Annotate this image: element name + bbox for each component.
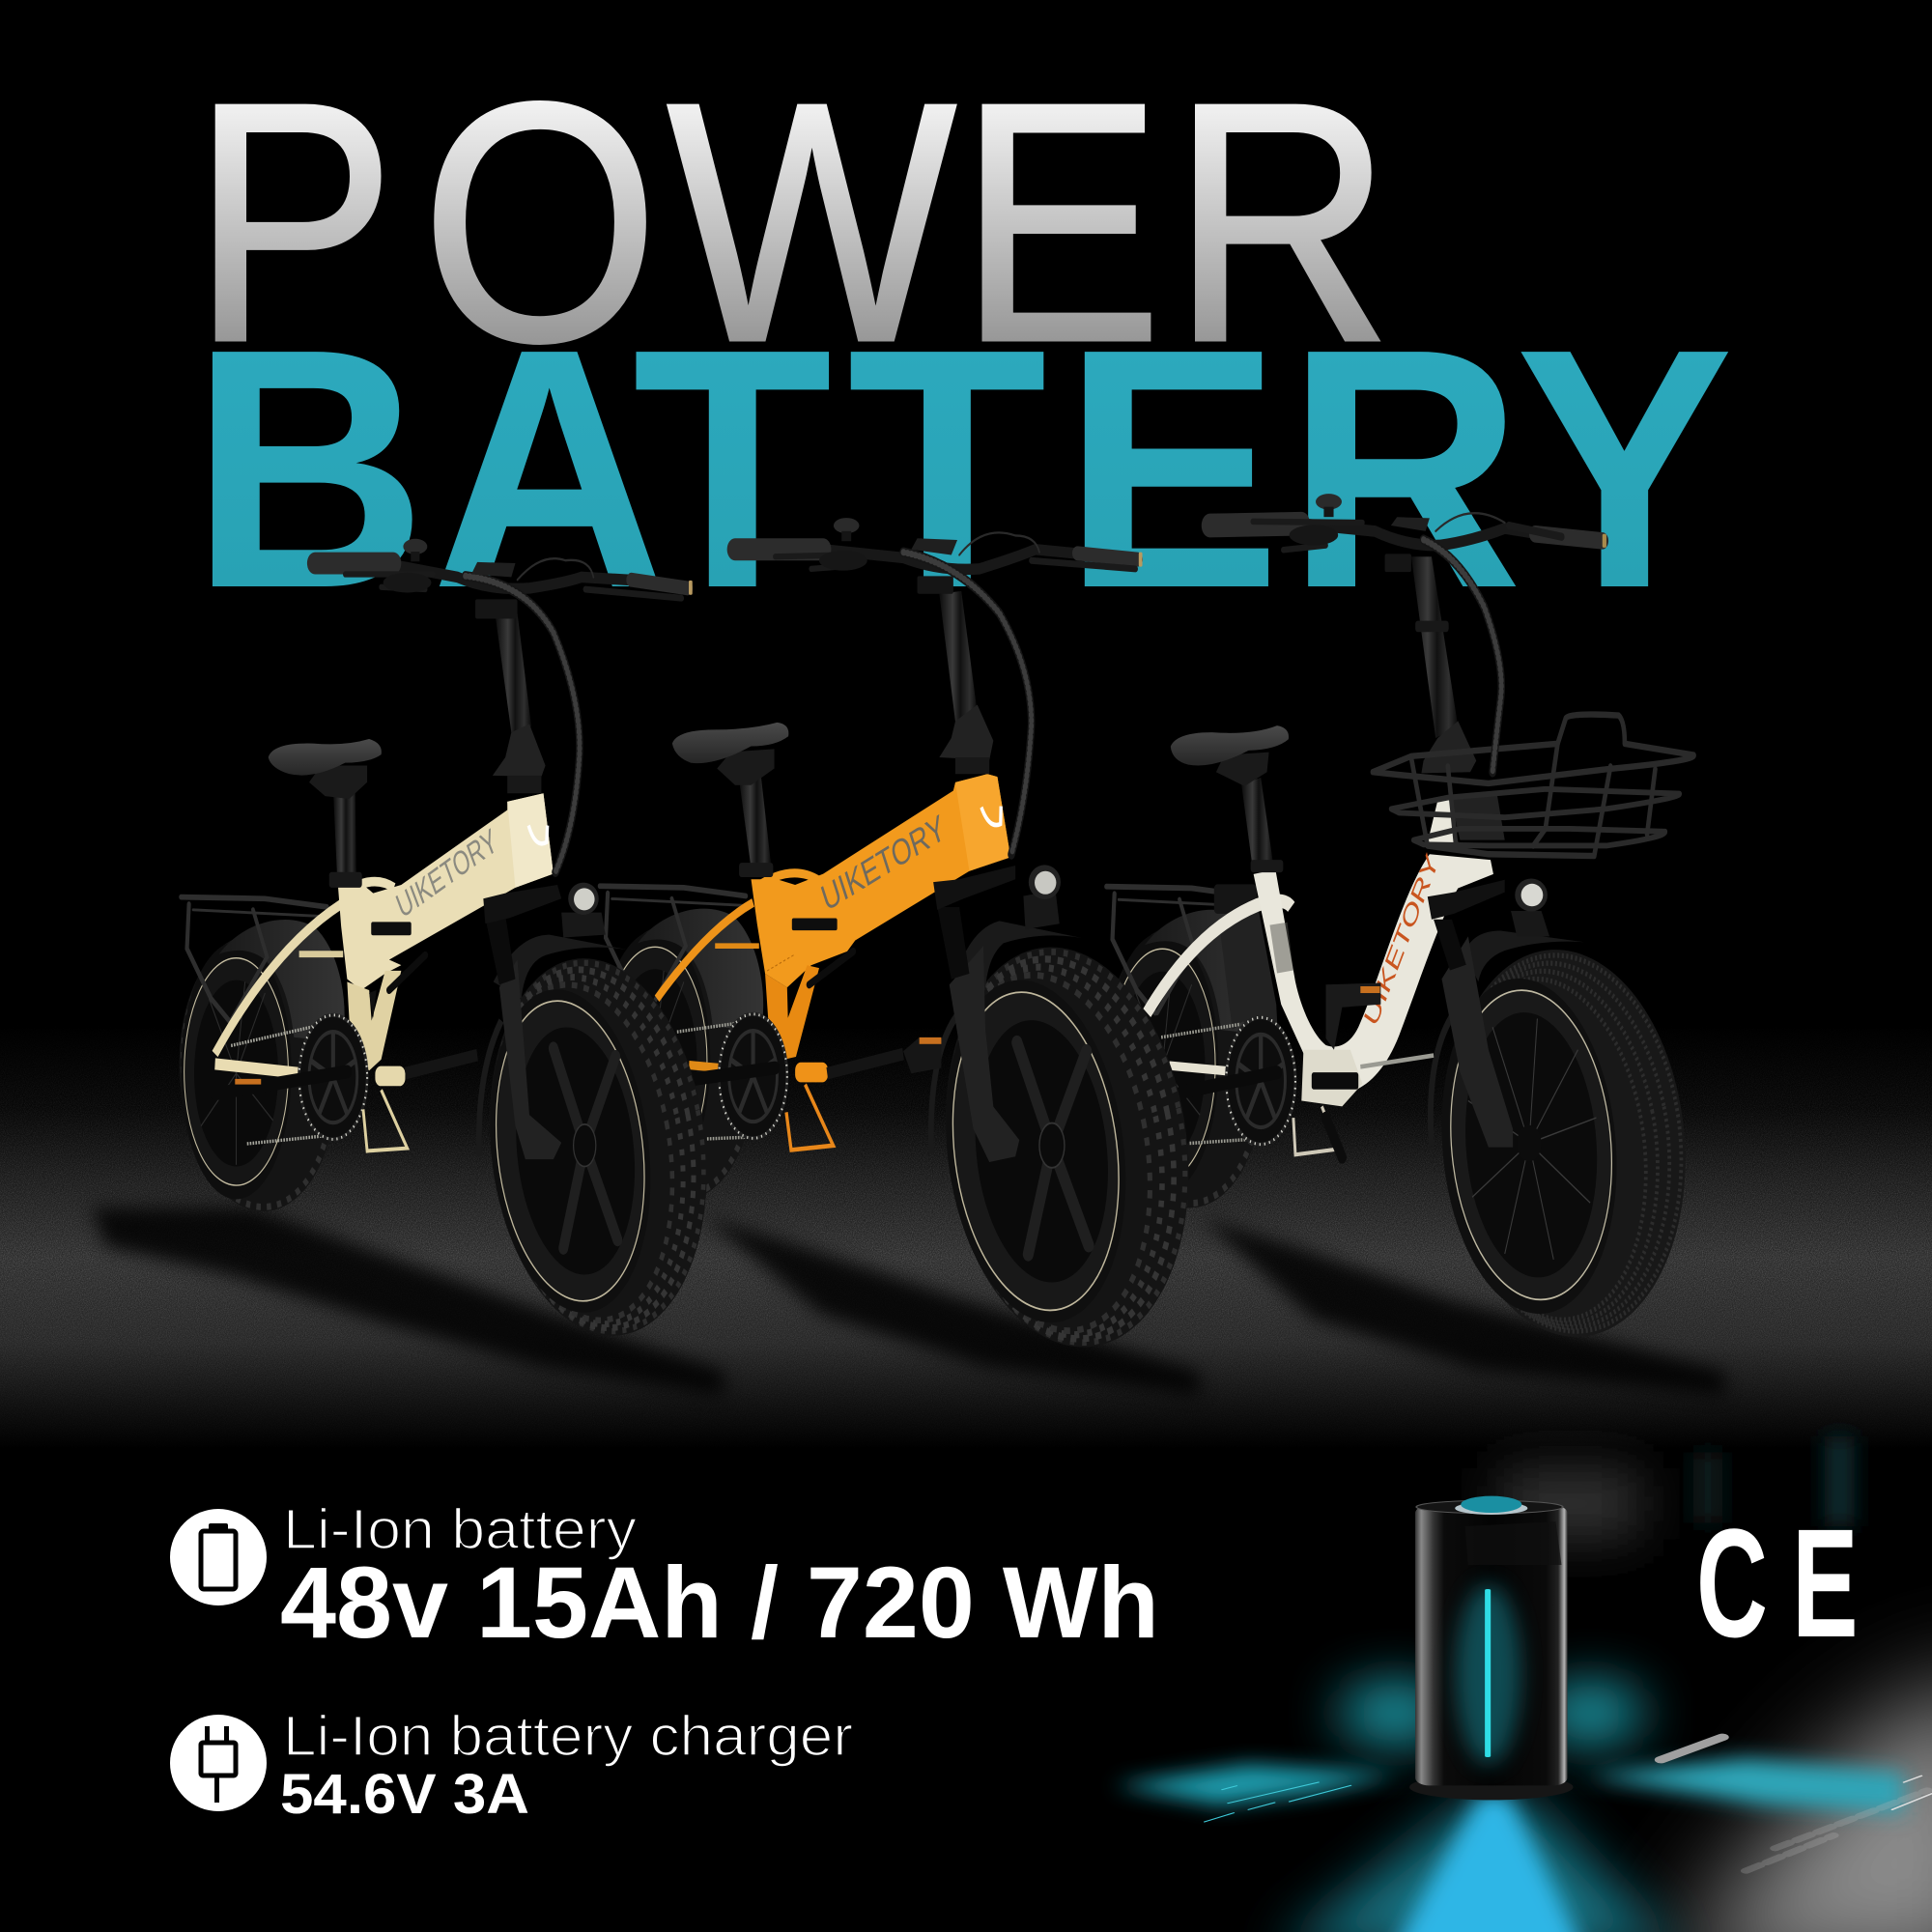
handlebar xyxy=(315,558,688,872)
seat xyxy=(1171,725,1289,872)
handlebar xyxy=(735,532,1138,854)
stem xyxy=(1385,554,1505,843)
front mudguard stay xyxy=(479,1021,501,1156)
bike 1: cream folding bike xyxy=(166,539,736,1370)
bike 2: orange folding bike xyxy=(585,518,1222,1383)
fork and fender xyxy=(483,883,628,1159)
spec icon: plug xyxy=(170,1715,267,1811)
seat xyxy=(269,739,382,888)
rear wheel xyxy=(585,886,768,1214)
bike 3: white step-through with basket xyxy=(1092,494,1716,1375)
frame logo: UIKETORY xyxy=(817,808,950,920)
battery top xyxy=(1416,1496,1563,1515)
battery shoulder xyxy=(1465,1521,1561,1565)
spec value: charger output: 54.6V 3A xyxy=(280,1763,529,1826)
spec label: charger type: Li-Ion battery charger xyxy=(283,1705,853,1768)
battery body xyxy=(1415,1505,1568,1785)
fork and fender xyxy=(1428,879,1584,1148)
teal glow lobes xyxy=(1114,1683,1904,1932)
front wheel xyxy=(460,924,736,1370)
drivetrain xyxy=(1161,982,1434,1157)
title: BATTERY: BATTERY xyxy=(190,279,1734,659)
frame xyxy=(1147,854,1493,1106)
front mudguard stay xyxy=(1431,1010,1456,1146)
ground xyxy=(0,1024,1932,1449)
front wheel xyxy=(1415,912,1716,1375)
basket xyxy=(1373,715,1694,856)
title: POWER: POWER xyxy=(191,32,1393,413)
battery base xyxy=(1409,1775,1574,1800)
rear wheel xyxy=(1092,887,1277,1222)
front mudguard stay xyxy=(931,1012,959,1153)
stem xyxy=(918,576,993,774)
drivetrain xyxy=(215,922,477,1151)
spec value: battery capacity: 48v 15Ah / 720 Wh xyxy=(280,1547,1159,1660)
gray light haze xyxy=(1670,1674,1932,1932)
logo mark xyxy=(528,826,548,843)
blurred background light xyxy=(1500,1436,1854,1539)
front wheel xyxy=(913,911,1222,1383)
CE mark: CE xyxy=(1696,1497,1859,1670)
battery light line xyxy=(1485,1589,1491,1757)
fork and fender xyxy=(933,865,1094,1162)
frame xyxy=(657,774,1010,1082)
frame logo: UIKETORY xyxy=(1360,849,1443,1032)
ground shadows xyxy=(92,1208,1724,1396)
handlebar xyxy=(1210,513,1603,772)
battery pack xyxy=(1214,884,1278,1036)
battery scene xyxy=(1114,1436,1932,1932)
rear wheel xyxy=(166,897,349,1226)
drivetrain xyxy=(677,918,941,1150)
battery inner glow xyxy=(1456,1584,1520,1765)
seat xyxy=(672,723,788,877)
spec label: battery type: Li-Ion battery xyxy=(283,1498,637,1561)
spec icon: battery xyxy=(170,1509,267,1605)
logo mark xyxy=(981,807,1001,825)
frame xyxy=(215,793,554,1086)
floor light streaks xyxy=(1205,1737,1932,1871)
stem xyxy=(475,599,546,793)
frame logo: UIKETORY xyxy=(391,821,501,925)
